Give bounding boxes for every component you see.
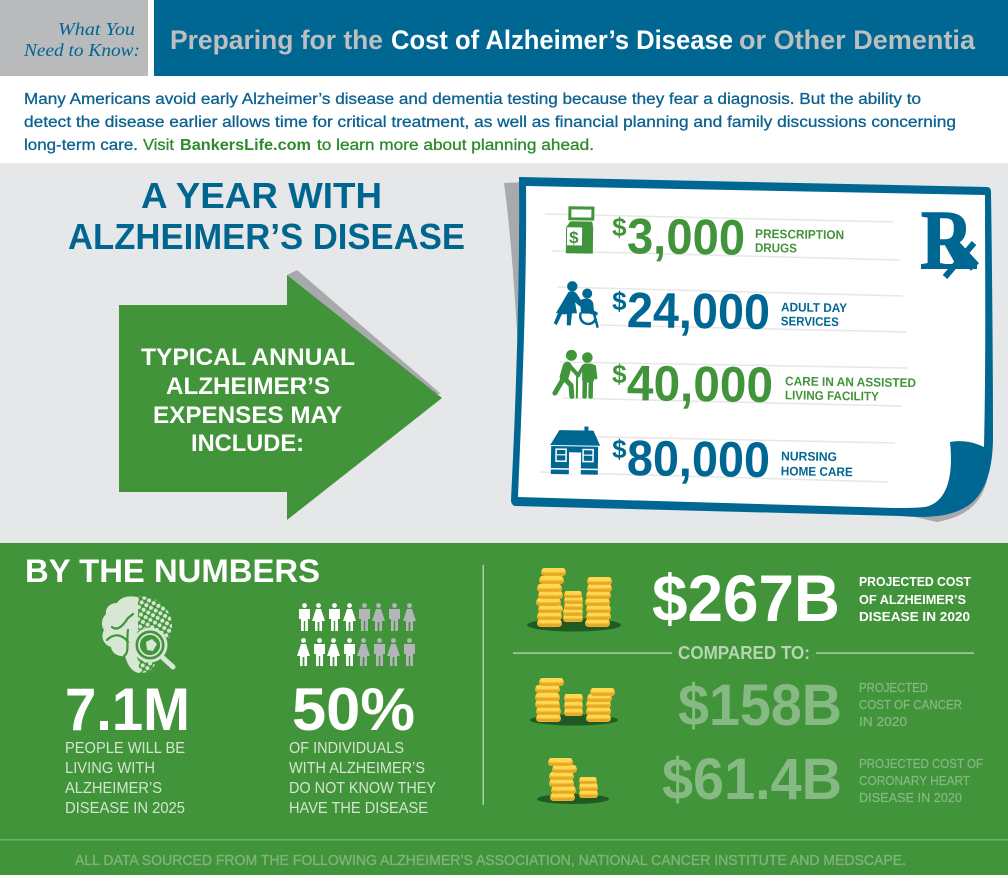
stat: $61.4B: $61.4B	[662, 747, 842, 812]
arrow text: EXPENSES MAY	[153, 402, 342, 429]
title text	[170, 25, 975, 55]
stat: 7.1M: 7.1M	[65, 676, 190, 743]
label: care in an assisted living facility: LIVING FACILITY	[785, 388, 880, 404]
intro paragraph: long-term care.	[24, 137, 138, 154]
label: care in an assisted living facility	[785, 374, 916, 404]
label: nursing home care: NURSING	[781, 449, 837, 464]
intro paragraph	[24, 91, 956, 154]
caption: 7.1M people: ALZHEIMER’S	[65, 780, 162, 797]
price: $3,000: $	[612, 212, 627, 242]
compared to divider: COMPARED TO:	[678, 643, 810, 663]
icon: elderly couple with cane	[555, 350, 596, 399]
stat: 50%: 50%	[292, 676, 415, 743]
intro paragraph: detect the disease earlier allows time for critical treatment, as well as financial planning and family discussions concerning	[24, 114, 956, 131]
icon: coins medium	[530, 678, 618, 726]
label: projected cost of coronary heart disease: CORONARY HEART	[859, 774, 970, 788]
title text: Preparing for the	[170, 25, 383, 55]
prescription paper	[504, 177, 993, 522]
arrow text: TYPICAL ANNUAL	[141, 344, 355, 371]
label: nursing home care: HOME CARE	[781, 464, 853, 479]
caption: 7.1M people: LIVING WITH	[65, 760, 155, 777]
header label text: Need to Know:	[23, 40, 140, 60]
icon: pill bottle	[566, 208, 593, 254]
price: $24,000: 24,000	[627, 282, 770, 340]
stat: $158B: $158B	[678, 673, 842, 738]
icon: Rx symbol: R	[921, 194, 974, 287]
label: projected cost of coronary heart disease	[859, 757, 983, 805]
label: nursing home care	[781, 449, 853, 479]
header label text: What You	[58, 19, 135, 39]
icon: pill bottle: $	[569, 228, 579, 247]
price: $80,000: 80,000	[627, 430, 770, 488]
heading: by the numbers: BY THE NUMBERS	[25, 553, 320, 589]
heading: a year with Alzheimer's disease: ALZHEIMER’S DISEASE	[68, 216, 465, 257]
price: $40,000: $	[612, 359, 627, 389]
title text: or Other Dementia	[739, 25, 975, 55]
label: projected cost of cancer: PROJECTED	[859, 681, 928, 695]
footer source note: ALL DATA SOURCED FROM THE FOLLOWING ALZHEIMER’S ASSOCIATION, NATIONAL CANCER INSTITUTE AND MEDSCAPE.	[75, 852, 906, 869]
row: adult day services	[554, 281, 848, 341]
label: projected cost of Alzheimer's: PROJECTED COST	[859, 574, 971, 589]
heading: a year with Alzheimer's disease	[68, 175, 465, 257]
label: projected cost of Alzheimer's: DISEASE IN 2020	[859, 609, 970, 624]
arrow text	[141, 344, 355, 457]
label: adult day services	[781, 300, 848, 329]
row: nursing home	[550, 426, 853, 489]
caption: 50% of individuals: OF INDIVIDUALS	[289, 740, 404, 757]
label: prescription drugs: DRUGS	[755, 241, 797, 255]
heading: a year with Alzheimer's disease: A YEAR WITH	[141, 175, 382, 216]
price: $3,000: 3,000	[627, 208, 745, 266]
label: projected cost of Alzheimer's: OF ALZHEIMER’S	[859, 592, 966, 607]
icon: coins large	[527, 568, 621, 632]
caption: 7.1M people: DISEASE IN 2025	[65, 800, 185, 817]
intro paragraph: BankersLife.com	[180, 137, 311, 154]
label: projected cost of cancer: COST OF CANCER	[859, 698, 962, 712]
label: projected cost of cancer	[859, 681, 962, 729]
label: care in an assisted living facility: CARE IN AN ASSISTED	[785, 374, 916, 390]
caption: 7.1M people	[65, 740, 185, 817]
label: projected cost of cancer: IN 2020	[859, 715, 907, 729]
icon: coins small	[537, 758, 609, 804]
price: $40,000: 40,000	[627, 355, 773, 413]
label: prescription drugs	[755, 227, 844, 256]
icon: brain with magnifier	[102, 596, 173, 673]
arrow text: INCLUDE:	[191, 430, 304, 457]
title banner	[154, 0, 1008, 76]
caption: 50% of individuals	[289, 740, 436, 817]
arrow: typical annual expenses	[119, 270, 442, 520]
caption: 50% of individuals: WITH ALZHEIMER’S	[289, 760, 425, 777]
intro paragraph: Visit	[143, 137, 175, 154]
label: adult day services: SERVICES	[781, 314, 839, 329]
panel: by the numbers	[0, 543, 1008, 875]
icon: house	[550, 426, 600, 475]
header label panel	[0, 0, 148, 76]
label: projected cost of Alzheimer's	[859, 574, 971, 624]
title text: Cost of Alzheimer’s Disease	[391, 25, 733, 55]
icon: caregiver and wheelchair	[554, 281, 598, 328]
label: projected cost of coronary heart disease: PROJECTED COST OF	[859, 757, 983, 771]
intro paragraph: to learn more about planning ahead.	[317, 137, 594, 154]
pictogram: half of people	[297, 603, 416, 666]
stat: $267B: $267B	[652, 561, 840, 635]
intro paragraph: Many Americans avoid early Alzheimer’s disease and dementia testing because they fear a diagnosis. But the ability to	[24, 91, 921, 108]
caption: 50% of individuals: HAVE THE DISEASE	[289, 800, 428, 817]
arrow text: ALZHEIMER’S	[166, 373, 330, 400]
label: prescription drugs: PRESCRIPTION	[755, 227, 844, 242]
header label text	[23, 19, 140, 60]
price: $80,000: $	[612, 434, 627, 464]
caption: 50% of individuals: DO NOT KNOW THEY	[289, 780, 436, 797]
caption: 7.1M people: PEOPLE WILL BE	[65, 740, 185, 757]
price: $24,000: $	[612, 286, 627, 316]
row: prescription drugs	[566, 207, 844, 267]
label: projected cost of coronary heart disease: DISEASE IN 2020	[859, 791, 962, 805]
row: assisted living	[555, 350, 916, 415]
label: adult day services: ADULT DAY	[781, 300, 848, 315]
